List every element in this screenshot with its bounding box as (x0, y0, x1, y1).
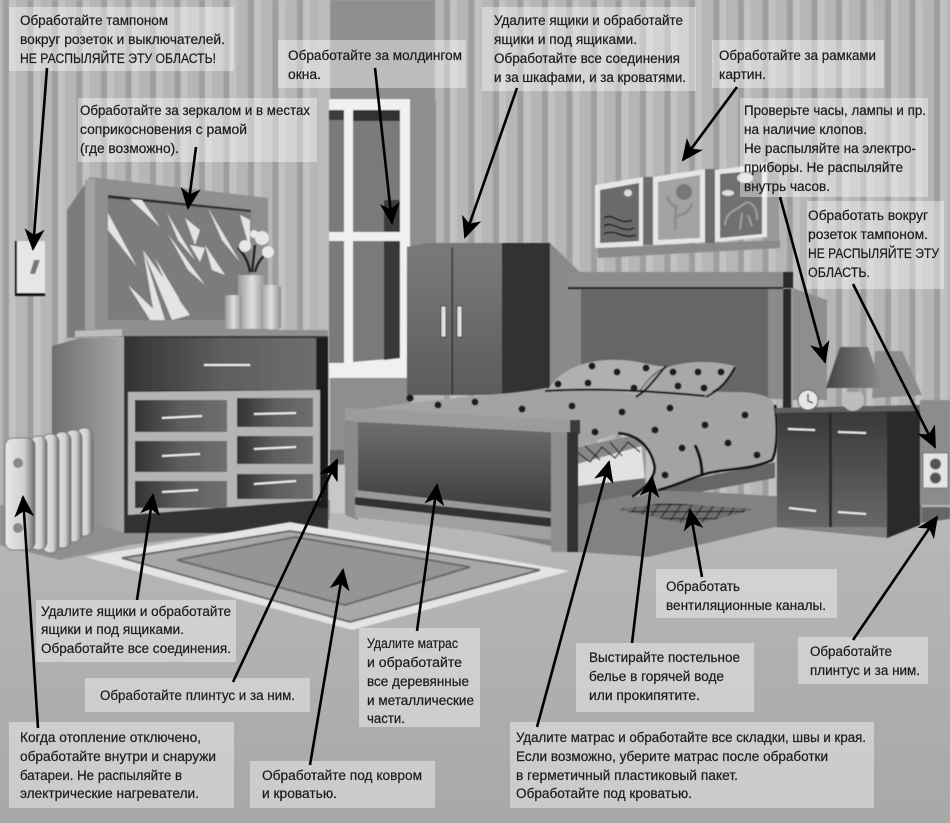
callout: clocks and lamps: приборы. Не распыляйте (744, 160, 903, 175)
flowers and vases (225, 230, 281, 329)
arrow: to radiator (23, 497, 38, 728)
callout: dresser drawers: ящики и под ящиками. (41, 622, 184, 637)
callout: baseboard, right: Обработайте (810, 644, 892, 659)
callout: wardrobe drawers (482, 7, 696, 91)
callout: mirror: (где возможно). (80, 141, 179, 156)
callout: radiator: Когда отопление отключено, (20, 730, 201, 745)
callout: mattress wooden parts (359, 628, 480, 727)
callout: baseboard, right (798, 637, 928, 684)
callout: mattress seams: Обработайте под кроватью. (516, 786, 692, 801)
callout: under rug (250, 761, 435, 808)
bed blanket (362, 360, 777, 498)
arrow: to right outlet (853, 284, 935, 447)
callout: clocks and lamps: внутрь часов. (744, 179, 830, 194)
callout: window molding (278, 40, 466, 88)
arrow: to left baseboard (233, 460, 337, 682)
radiator (5, 428, 93, 553)
callout: mattress seams: Удалите матрас и обработайте все складки, швы и края. (516, 730, 866, 745)
arrow: to window molding (375, 68, 392, 223)
callout: wardrobe drawers: Удалите ящики и обработайте (494, 13, 683, 28)
callout: mattress seams (510, 722, 874, 808)
callout: window molding: окна. (288, 67, 321, 82)
callout: mirror: соприкосновения с рамой (80, 122, 247, 137)
callout: ventilation: вентиляционные каналы. (666, 598, 826, 613)
callout: mattress wooden parts: части. (367, 711, 405, 726)
callout: ventilation (656, 569, 837, 618)
arrow: to footboard (417, 485, 437, 631)
arrow: to lamp and clock (780, 197, 825, 362)
callout: outlets, right (807, 201, 944, 289)
callout: mattress wooden parts: и металлические (367, 693, 474, 708)
callout: outlets, right: розеток тампоном. (808, 227, 928, 242)
floor vent (617, 503, 755, 525)
arrow: to box spring (537, 462, 609, 727)
callout: mattress seams: в герметичный пластиковый пакет. (516, 768, 738, 783)
callout: bedding: или прокипятите. (589, 688, 700, 703)
callout: baseboard, left (85, 678, 310, 712)
callout: bedding: Выстирайте постельное (589, 650, 740, 665)
arrow: to vent (690, 510, 702, 577)
arrow: to pictures (683, 87, 737, 160)
callout: outlets and switches, top left: Обработайте тампоном (20, 13, 168, 28)
window (329, 99, 410, 378)
wall plug plate (330, 450, 344, 464)
callout: dresser drawers: Удалите ящики и обработайте (41, 604, 231, 619)
arrow: to wardrobe (465, 88, 517, 237)
nightstand (775, 405, 920, 538)
callout: clocks and lamps: Не распыляйте на электро- (744, 141, 916, 156)
callout: wardrobe drawers: Обработайте все соединения (494, 51, 680, 66)
callout: baseboard, right: плинтус и за ним. (810, 663, 920, 678)
dresser (52, 329, 328, 533)
arrow: to rug (310, 570, 343, 765)
callout: dresser drawers: Обработайте все соединения. (41, 641, 231, 656)
callout: picture frames (712, 40, 884, 88)
callout: outlets and switches, top left: вокруг розеток и выключателей. (20, 32, 225, 47)
wardrobe (407, 243, 585, 395)
callout: wardrobe drawers: ящики и под ящиками. (494, 32, 637, 47)
callout: bedding (576, 643, 754, 712)
callout: mirror: Обработайте за зеркалом и в местах (80, 103, 310, 118)
callout: radiator: батареи. Не распыляйте в (20, 768, 182, 783)
arrow: to bedding (632, 477, 652, 643)
arrow: to right baseboard (853, 517, 937, 640)
callout: mattress wooden parts: все деревянные (367, 674, 469, 689)
callout: outlets and switches, top left (9, 7, 234, 71)
callout: radiator: обработайте внутри и снаружи (20, 749, 216, 764)
callout: radiator (9, 722, 234, 808)
callout: mirror (78, 98, 317, 162)
callout: radiator: электрические нагреватели. (20, 786, 199, 801)
callout: outlets and switches, top left: НЕ РАСПЫЛЯЙТЕ ЭТУ ОБЛАСТЬ! (20, 51, 216, 66)
arrow: to light switch (33, 68, 47, 249)
bed footboard (345, 408, 580, 552)
callout: picture frames: Обработайте за рамками (719, 48, 876, 63)
callout: clocks and lamps: на наличие клопов. (744, 122, 867, 137)
rug (85, 522, 570, 630)
callout: clocks and lamps: Проверьте часы, лампы и пр. (744, 103, 926, 118)
callout: dresser drawers (36, 600, 236, 662)
box spring (577, 434, 645, 505)
callout: ventilation: Обработать (666, 579, 740, 594)
callout: outlets, right: ОБЛАСТЬ. (808, 265, 870, 280)
light switch (15, 241, 45, 296)
callout: bedding: белье в горячей воде (589, 669, 724, 684)
pictures on the wall (595, 163, 780, 258)
callout: clocks and lamps (740, 98, 928, 197)
callout: outlets, right: Обработать вокруг (808, 208, 928, 223)
headboard (568, 272, 793, 409)
callout: picture frames: картин. (719, 67, 766, 82)
arrow: to mirror (188, 147, 196, 208)
callout: mattress wooden parts: Удалите матрас (367, 636, 458, 651)
wall outlet (923, 453, 948, 488)
callout: under rug: и кроватью. (262, 786, 337, 801)
table lamp and clock (798, 347, 922, 411)
callout: under rug: Обработайте под ковром (262, 768, 422, 783)
arrow: to dresser drawers (137, 495, 153, 600)
mirror (67, 177, 268, 338)
callout: mattress seams: Если возможно, уберите матрас после обработки (516, 749, 828, 764)
callout: mattress wooden parts: и обработайте (367, 655, 462, 670)
callout: wardrobe drawers: и за шкафами, и за кроватями. (494, 70, 686, 85)
callout: baseboard, left: Обработайте плинтус и за ним. (100, 688, 295, 703)
callout: window molding: Обработайте за молдингом (288, 48, 462, 63)
